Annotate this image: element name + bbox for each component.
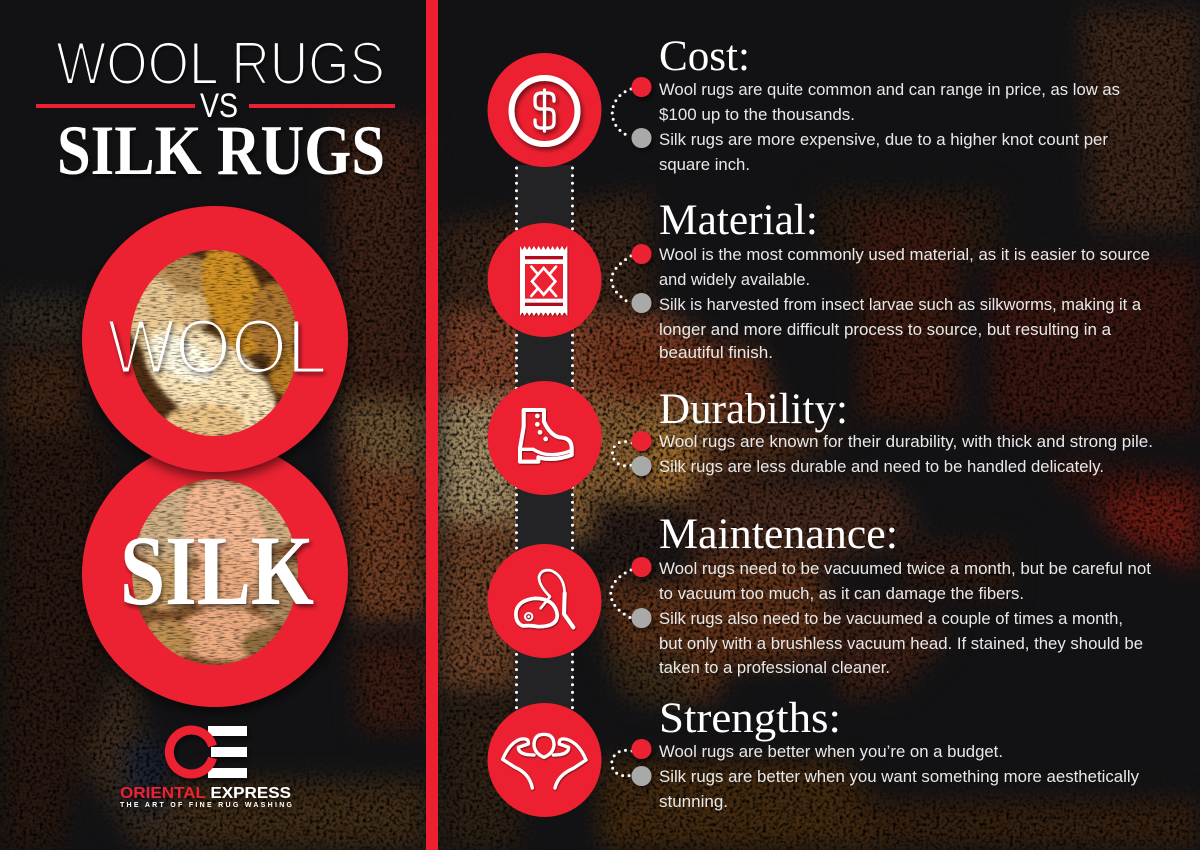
icon: vacuum cleaner <box>488 544 602 658</box>
section: strengths <box>488 695 1139 817</box>
logo E middle bar <box>211 747 247 757</box>
title block <box>36 30 395 190</box>
text: material: beautiful finish. <box>659 343 773 362</box>
heading: cost: Cost: <box>659 33 750 80</box>
text: strengths: Silk rugs are better when you want something more aesthetically <box>659 767 1139 786</box>
wool photo <box>130 250 296 436</box>
centre bright rug pile <box>440 310 720 420</box>
title rule right <box>249 104 395 108</box>
section: durability <box>488 381 1153 495</box>
silk photo <box>132 479 298 665</box>
text: strengths <box>659 742 1139 811</box>
connector: maintenance <box>611 557 652 628</box>
central red divider bar <box>426 0 438 850</box>
text: material: Silk is harvested from insect larvae such as silkworms, making it a <box>659 295 1142 314</box>
text: strengths: Wool rugs are better when you’re on a budget. <box>659 742 1003 761</box>
text: strengths: stunning. <box>659 792 728 811</box>
bottom rugs <box>440 700 520 850</box>
section: cost <box>488 33 1120 174</box>
text: maintenance <box>659 559 1151 677</box>
connector: strengths <box>612 739 652 786</box>
logo: Oriental Express <box>120 726 293 809</box>
text: durability: Wool rugs are known for their durability, with thick and strong pile. <box>659 432 1153 451</box>
connector: durability <box>612 431 652 476</box>
text: maintenance: taken to a professional cleaner. <box>659 658 890 677</box>
top right woven rugs <box>1080 10 1200 230</box>
text: cost: $100 up to the thousands. <box>659 105 855 124</box>
text: material: Wool is the most commonly used material, as it is easier to source <box>659 245 1150 264</box>
text: durability: Silk rugs are less durable and need to be handled delicately. <box>659 457 1104 476</box>
heading: durability: Durability: <box>659 386 848 433</box>
red cushions <box>1090 470 1200 570</box>
connector: cost <box>612 77 652 148</box>
logo wordmark: ORIENTAL EXPRESS <box>120 785 291 802</box>
text: maintenance: but only with a brushless vacuum head. If stained, they should be <box>659 634 1143 653</box>
left column rugs <box>330 120 426 460</box>
text: cost <box>659 80 1120 174</box>
logo tagline: THE ART OF FINE RUG WASHING <box>120 802 293 809</box>
wool label: WOOL <box>107 304 327 390</box>
icon: rug <box>488 223 602 337</box>
section: material <box>488 197 1150 362</box>
logo C ring <box>169 730 212 774</box>
icon: boot <box>488 381 602 495</box>
connector: material <box>612 244 652 313</box>
text: maintenance: Wool rugs need to be vacuumed twice a month, but be careful not <box>659 559 1151 578</box>
vs label: VS <box>200 87 238 125</box>
icon: flexing strongman <box>488 703 602 817</box>
section: maintenance <box>488 511 1151 677</box>
text: cost: Wool rugs are quite common and can range in price, as low as <box>659 80 1120 99</box>
title rule left <box>36 104 195 108</box>
heading: strengths: Strengths: <box>659 695 841 742</box>
wool badge <box>82 206 348 472</box>
icon: dollar coin <box>488 53 602 167</box>
timeline rail <box>516 165 573 710</box>
wool red ring <box>82 206 348 472</box>
text: durability <box>659 432 1153 476</box>
logo E top and bottom bars <box>208 726 247 778</box>
silk red ring <box>82 441 348 707</box>
heading: material: Material: <box>659 197 818 244</box>
text: material: longer and more difficult process to source, but resulting in a <box>659 320 1112 339</box>
text: material <box>659 245 1150 362</box>
text: cost: Silk rugs are more expensive, due to a higher knot count per <box>659 130 1108 149</box>
silk label: SILK <box>120 515 314 626</box>
text: cost: square inch. <box>659 155 750 174</box>
heading: Wool Rugs: WOOL RUGS <box>56 30 385 97</box>
heading: Silk Rugs: SILK RUGS <box>57 112 385 190</box>
heading: maintenance: Maintenance: <box>659 511 898 558</box>
text: maintenance: Silk rugs also need to be vacuumed a couple of times a month, <box>659 609 1123 628</box>
silk badge <box>82 441 348 707</box>
text: maintenance: to vacuum too much, as it can damage the fibers. <box>659 584 1024 603</box>
text: material: and widely available. <box>659 270 810 289</box>
